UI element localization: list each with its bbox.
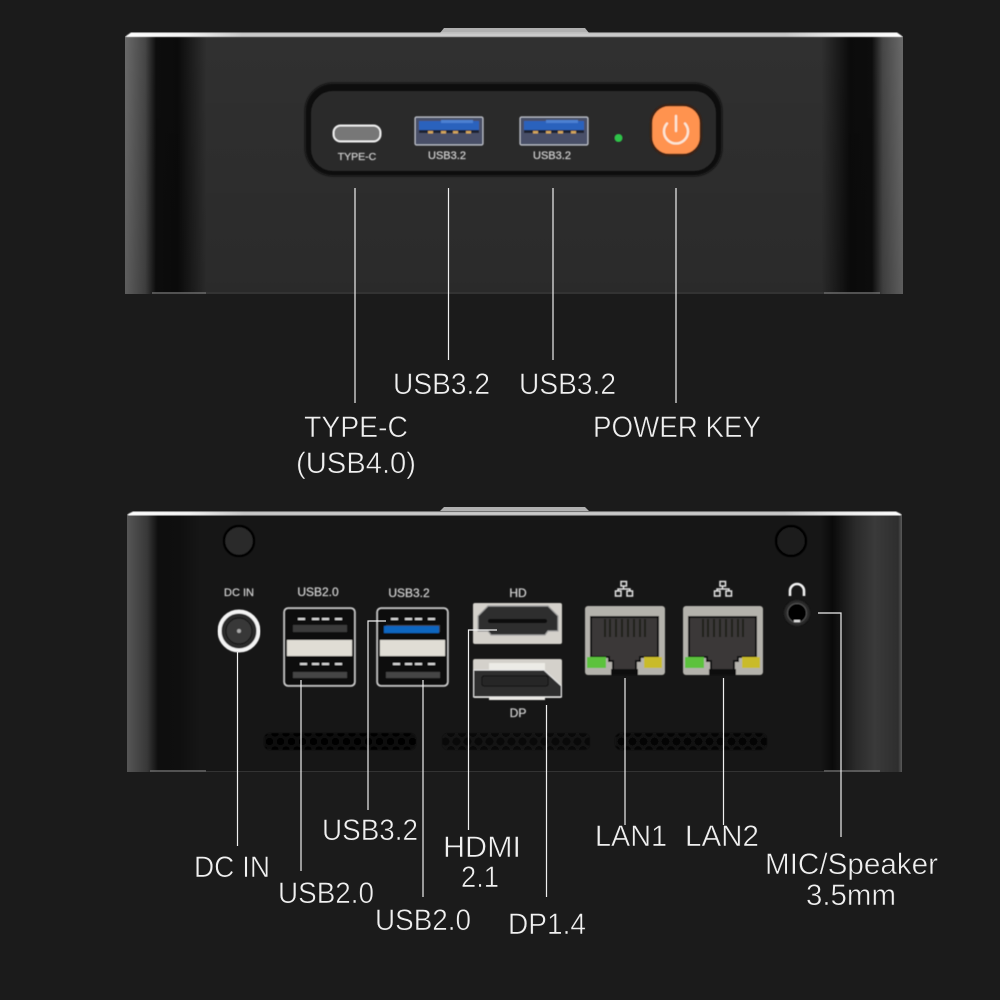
callout: mic/speaker: 3.5mm: [806, 879, 896, 912]
callout: usb3.2 right: USB3.2: [519, 368, 616, 401]
callout: type-c: TYPE-C: [304, 411, 408, 444]
callout: dc in: DC IN: [194, 851, 270, 884]
callout: usb3.2: USB3.2: [322, 814, 418, 847]
front body: [125, 32, 903, 294]
port: usb3.2 right: [520, 117, 588, 162]
callout: power key: POWER KEY: [593, 411, 761, 444]
callout: usb2.0 right: USB2.0: [375, 904, 471, 937]
port: usb3.2 left: USB3.2: [428, 150, 466, 162]
port: lan 1: [585, 582, 665, 675]
screw right: [776, 526, 806, 556]
callout: lan1: LAN1: [595, 820, 667, 853]
callout: hdmi: [443, 630, 521, 894]
callout: usb2.0 left: USB2.0: [278, 877, 374, 910]
port: usb3.2 right: USB3.2: [533, 150, 571, 162]
callout: hdmi: 2.1: [461, 861, 499, 894]
callout: lan2: LAN2: [685, 820, 759, 853]
callout: type-c: (USB4.0): [296, 447, 416, 480]
port: dc in: DC IN: [224, 587, 254, 599]
rear body: [127, 512, 902, 772]
port: type-c: TYPE-C: [338, 151, 377, 163]
callout: usb3.2: [322, 621, 418, 847]
callout: mic/speaker: [765, 613, 938, 912]
callout: dp: DP1.4: [508, 908, 586, 941]
port: usb2.0 stack: [284, 585, 355, 686]
device: rear view: [127, 507, 902, 772]
device: front view: [125, 28, 903, 294]
callout: usb3.2 left: USB3.2: [393, 368, 490, 401]
port: displayport: [473, 659, 562, 720]
port panel: [305, 83, 722, 176]
port: audio jack: [784, 584, 810, 626]
callout: hdmi: HDMI: [443, 831, 521, 864]
callout: mic/speaker: MIC/Speaker: [765, 848, 938, 881]
port: hdmi: HD: [509, 586, 527, 600]
port: lan 2: [683, 582, 763, 675]
port: dc in: [220, 587, 258, 650]
screw left: [224, 526, 254, 556]
port: hdmi: [473, 586, 562, 644]
port: type-c: [334, 126, 380, 163]
icon: power button: [651, 105, 701, 155]
top lid notch: [440, 28, 589, 33]
callout: type-c: [296, 188, 416, 480]
port: usb3.2 left: [415, 117, 483, 162]
led: [614, 134, 622, 142]
port: usb3.2 stack: [377, 586, 448, 686]
callouts: rear: [194, 613, 938, 941]
rear lid notch: [440, 507, 589, 511]
callouts: front: [296, 188, 761, 480]
port: usb3.2 stack: USB3.2: [388, 586, 430, 600]
vents: [264, 733, 767, 750]
port: displayport: DP: [510, 706, 526, 720]
port: usb2.0 stack: USB2.0: [297, 585, 339, 599]
